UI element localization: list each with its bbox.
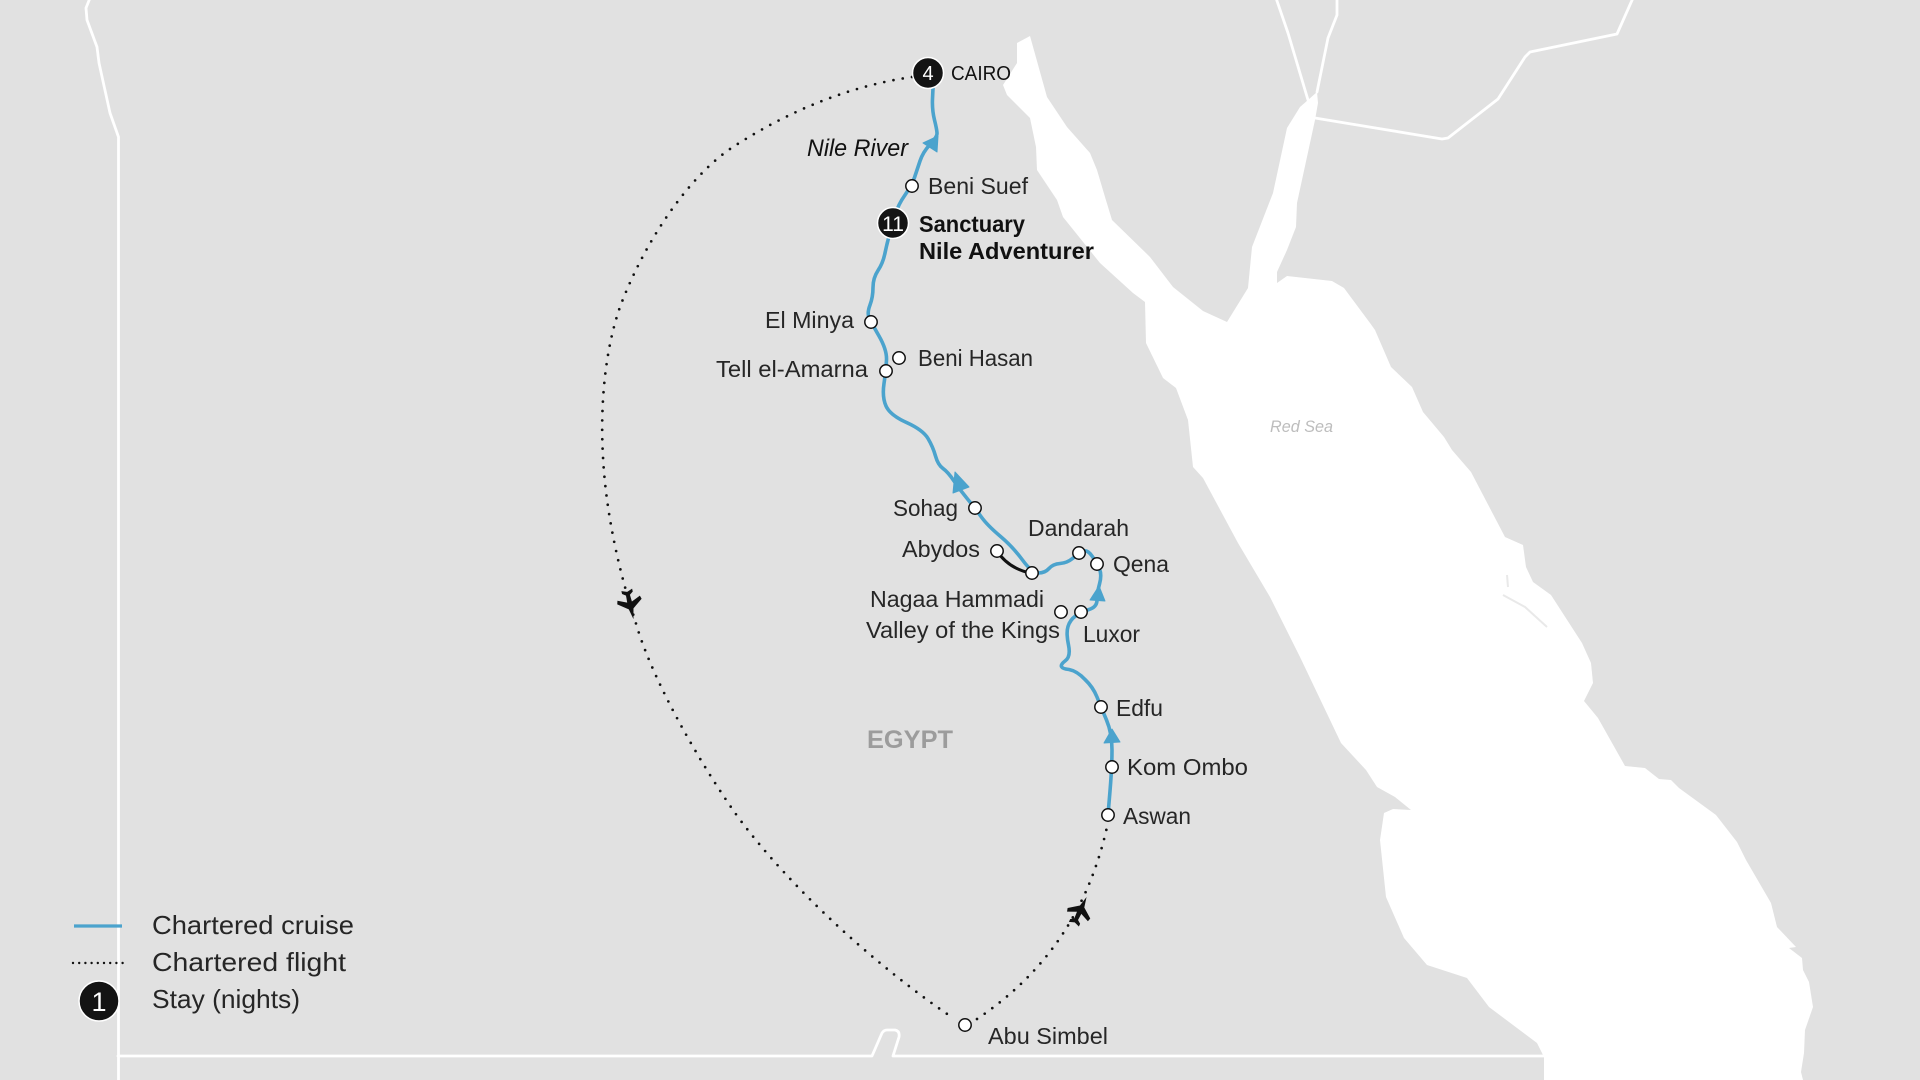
stay marker: Cairo 4 nights: 4	[922, 63, 934, 85]
stay marker: Cairo 4 nights	[912, 58, 944, 88]
sea label: Red Sea	[1270, 417, 1333, 436]
legend: stay in nights	[79, 981, 300, 1021]
chartered cruise route	[868, 88, 1112, 815]
place labels: CAIRO	[951, 63, 1011, 85]
place labels: Dandarah	[1028, 515, 1129, 541]
country label: Egypt: EGYPT	[867, 726, 953, 754]
place labels: Valley of the Kings	[866, 617, 1060, 643]
stop markers	[865, 180, 1118, 1031]
place labels	[716, 63, 1248, 1049]
stay marker: ship 11 nights: 11	[882, 213, 904, 236]
chartered flight path	[602, 77, 1107, 1019]
place labels: Abu Simbel	[988, 1023, 1108, 1049]
direction arrows on the cruise route	[923, 136, 1120, 743]
place labels: Sanctuary	[919, 211, 1025, 237]
place labels: Nile River	[807, 135, 909, 162]
place labels: Beni Suef	[928, 173, 1029, 199]
place labels: Kom Ombo	[1127, 754, 1248, 780]
legend: stay in nights: 1	[91, 987, 107, 1017]
Red Sea and gulfs	[1003, 36, 1813, 1080]
place labels: Edfu	[1116, 695, 1163, 721]
place labels: Beni Hasan	[918, 345, 1033, 371]
legend: chartered cruise: Chartered cruise	[152, 910, 354, 940]
side trip to Abydos	[997, 551, 1030, 573]
place labels: Luxor	[1083, 621, 1140, 647]
place labels: El Minya	[765, 307, 854, 333]
place labels: Sohag	[893, 495, 958, 521]
legend: stay in nights: Stay (nights)	[152, 984, 300, 1014]
place labels: Tell el-Amarna	[716, 356, 868, 382]
place labels: Abydos	[902, 536, 980, 562]
place labels: Nagaa Hammadi	[870, 586, 1044, 612]
legend	[73, 910, 354, 1021]
place labels: Aswan	[1123, 803, 1191, 829]
legend: chartered flight: Chartered flight	[152, 947, 347, 977]
place labels: Qena	[1113, 551, 1169, 577]
icon: plane on Aswan flight	[1063, 892, 1098, 929]
icon: plane on return flight	[615, 587, 646, 622]
place labels: Nile Adventurer	[919, 238, 1094, 264]
stay marker: ship 11 nights	[878, 208, 908, 238]
reef details in the sea	[1503, 575, 1547, 627]
